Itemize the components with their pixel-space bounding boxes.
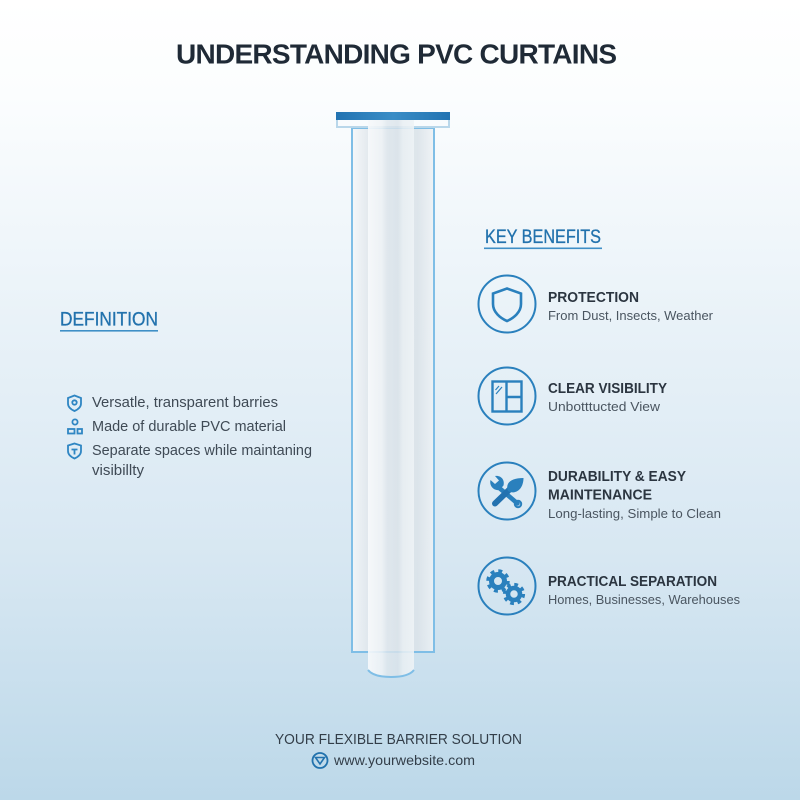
text: clear visibility: Unbotttucted View <box>548 399 661 414</box>
heading: key benefits: KEY BENEFITS <box>485 227 601 248</box>
heading: definition: DEFINITION <box>60 310 158 330</box>
text: clear visibility <box>548 381 667 414</box>
icon: website badge <box>312 753 328 768</box>
text: protection: From Dust, Insects, Weather <box>548 308 714 323</box>
icon: shield <box>478 276 536 332</box>
text: clear visibility: CLEAR VISIBILITY <box>548 381 667 397</box>
footer website: www.yourwebsite.com <box>333 752 475 768</box>
panel: definition <box>60 310 312 479</box>
text: separate spaces: Separate spaces while maintaning <box>92 443 312 459</box>
benefit: practical separation <box>478 558 740 614</box>
icon: shield with dot <box>68 396 81 411</box>
text: protection: PROTECTION <box>548 290 639 306</box>
curtain sheet frame <box>352 128 434 652</box>
benefit: protection <box>478 276 714 332</box>
text: practical separation: PRACTICAL SEPARATION <box>548 574 717 590</box>
icon: blocks <box>68 419 82 434</box>
mounting bar <box>336 112 450 128</box>
text: practical separation <box>548 574 740 607</box>
icon: tools and leaf <box>478 462 536 520</box>
text: durability: DURABILITY & EASY <box>548 469 686 485</box>
roll bottom edge <box>368 670 414 677</box>
footer tagline: YOUR FLEXIBLE BARRIER SOLUTION <box>275 731 522 748</box>
text: versatile: Versatle, transparent barries <box>92 395 278 411</box>
icon: gears <box>478 558 536 614</box>
illustration: PVC curtain <box>336 112 450 677</box>
text: practical separation: Homes, Businesses, Warehouses <box>548 592 740 607</box>
text: material: Made of durable PVC material <box>92 419 286 435</box>
text: durability <box>548 469 721 521</box>
benefit: clear visibility <box>478 368 667 424</box>
title: UNDERSTANDING PVC CURTAINS <box>176 38 617 70</box>
text: durability: MAINTENANCE <box>548 488 652 504</box>
curtain central roll <box>368 120 414 676</box>
icon: window <box>478 368 536 424</box>
panel: key benefits <box>478 227 740 614</box>
text: visibility: visibillty <box>92 463 145 479</box>
text: durability: Long-lasting, Simple to Clean <box>548 506 721 521</box>
benefit: durability <box>478 462 721 521</box>
icon: shield with plus <box>68 444 81 458</box>
text: protection <box>548 290 714 323</box>
